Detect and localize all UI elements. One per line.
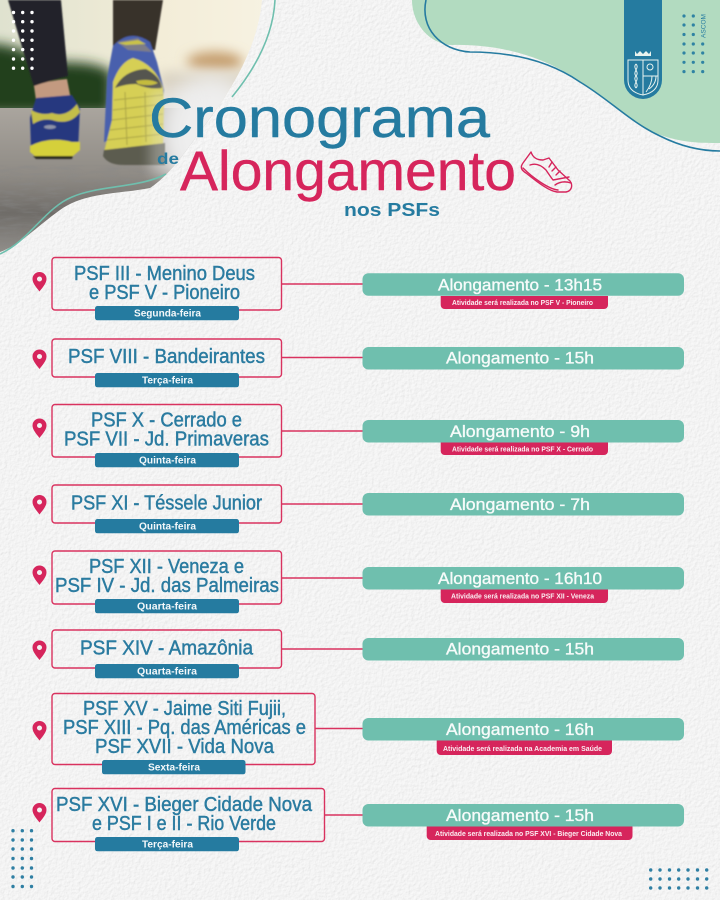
location box	[52, 551, 282, 604]
location name: PSF VIII - Bandeirantes	[68, 346, 265, 368]
time bar	[362, 347, 684, 370]
ASCOM vertical label: ASCOM	[700, 14, 708, 38]
location names	[55, 556, 279, 597]
row 5	[32, 551, 684, 613]
weekday pill: Quarta-feira	[137, 600, 197, 612]
connector	[282, 503, 363, 505]
location box	[52, 339, 282, 377]
location names: PSF III - Menino Deus	[74, 263, 255, 285]
location names: PSF XII - Veneza e	[89, 556, 244, 578]
location names: PSF XVII - Vida Nova	[95, 736, 275, 758]
location names: PSF XIII - Pq. das Américas e	[63, 717, 306, 739]
connector	[282, 648, 363, 650]
venue note: Atividade será realizada no PSF XVI - Bieger Cidade Nova	[435, 831, 622, 838]
location box	[52, 258, 282, 310]
weekday pill	[95, 837, 239, 851]
weekday pill	[95, 453, 239, 467]
weekday pill: Sexta-feira	[148, 762, 200, 774]
location names	[56, 794, 313, 835]
location box	[52, 485, 282, 523]
blue curve along the blob	[425, 0, 720, 151]
title	[149, 86, 516, 220]
map pin	[32, 272, 46, 292]
row 2	[32, 339, 684, 387]
photo: runner's feet on the road	[0, 0, 270, 258]
time bar	[362, 273, 684, 296]
row 4	[32, 485, 684, 533]
location names: PSF X - Cerrado e	[91, 410, 242, 432]
location names: e PSF V - Pioneiro	[89, 282, 240, 304]
location names: PSF VII - Jd. Primaveras	[64, 428, 269, 450]
weekday pill	[95, 306, 239, 320]
location box	[52, 630, 282, 668]
weekday pill	[95, 599, 239, 613]
blue dot grid, bottom right	[649, 868, 708, 890]
time bar: Alongamento - 13h15	[438, 276, 602, 294]
connector	[282, 430, 363, 432]
time bar: Alongamento - 16h10	[438, 569, 602, 588]
title line: nos PSFs: nos PSFs	[344, 200, 440, 220]
time bar	[362, 567, 684, 590]
title line: Cronograma: Cronograma	[149, 86, 491, 149]
connector	[282, 577, 363, 579]
time bar	[362, 493, 684, 516]
weekday pill: Quinta-feira	[139, 454, 196, 466]
location names	[63, 698, 306, 758]
teal curve outlining the photo	[0, 0, 275, 254]
venue note: Atividade será realizada na Academia em Saúde	[443, 746, 602, 753]
logo bookmark with shield	[624, 0, 662, 99]
weekday pill: Terça-feira	[142, 838, 193, 850]
location names: PSF XVI - Bieger Cidade Nova	[56, 794, 313, 816]
map pin	[32, 803, 46, 822]
connector	[325, 814, 363, 816]
venue note: Atividade será realizada no PSF XII - Veneza	[451, 594, 594, 600]
white dot grid over photo	[12, 11, 34, 70]
weekday pill	[95, 664, 239, 678]
location names: PSF XV - Jaime Siti Fujii,	[83, 698, 286, 720]
row 3	[32, 404, 684, 467]
map pin	[32, 640, 46, 660]
venue note: Atividade será realizada no PSF X - Cerrado	[452, 446, 593, 454]
green blob, top right	[412, 0, 720, 143]
crown	[635, 51, 651, 56]
location name: PSF XI - Téssele Junior	[71, 492, 262, 514]
location names: e PSF I e II - Rio Verde	[92, 813, 276, 835]
map pin	[32, 418, 46, 438]
weekday pill: Quinta-feira	[139, 520, 196, 532]
venue note	[427, 826, 632, 840]
time bar	[362, 718, 684, 740]
row 1	[32, 258, 684, 320]
location names	[74, 263, 255, 304]
venue note	[441, 296, 608, 309]
weekday pill: Terça-feira	[142, 374, 193, 386]
icon: sneaker	[521, 152, 572, 192]
time bar: Alongamento - 15h	[446, 806, 594, 825]
time bar	[362, 804, 684, 826]
weekday pill: Segunda-feira	[134, 308, 201, 320]
connector	[282, 283, 363, 285]
time bar: Alongamento - 15h	[446, 348, 594, 368]
time bar: Alongamento - 15h	[446, 640, 594, 658]
time bar: Alongamento - 16h	[446, 720, 594, 739]
map pin	[32, 566, 46, 585]
weekday pill	[102, 760, 246, 774]
title line: Alongamento: Alongamento	[180, 139, 516, 202]
venue note	[437, 740, 612, 755]
location names	[64, 410, 269, 450]
map pin	[32, 721, 46, 740]
venue note	[441, 442, 608, 455]
location box	[52, 404, 282, 457]
location box	[52, 694, 315, 764]
venue note	[441, 590, 608, 603]
row 6	[32, 630, 684, 678]
map pin	[32, 495, 46, 514]
map pin	[32, 350, 46, 369]
connector	[282, 356, 363, 358]
blue dot grid, bottom left	[11, 829, 33, 888]
time bar	[362, 638, 684, 660]
connector	[316, 728, 363, 730]
row 7	[32, 694, 684, 774]
weekday pill	[95, 519, 239, 533]
row 8	[32, 788, 684, 851]
location name: PSF XIV - Amazônia	[80, 638, 254, 660]
venue note: Atividade será realizada no PSF V - Pioneiro	[452, 300, 593, 307]
weekday pill: Quarta-feira	[137, 666, 197, 678]
title word: de: de	[157, 151, 179, 168]
shield	[628, 60, 658, 95]
time bar	[362, 420, 684, 442]
location names: PSF IV - Jd. das Palmeiras	[55, 575, 279, 597]
time bar: Alongamento - 7h	[450, 495, 590, 514]
weekday pill	[95, 373, 239, 387]
time bar: Alongamento - 9h	[450, 422, 590, 441]
teal dot grid, top right	[682, 14, 704, 73]
location box	[52, 788, 324, 842]
